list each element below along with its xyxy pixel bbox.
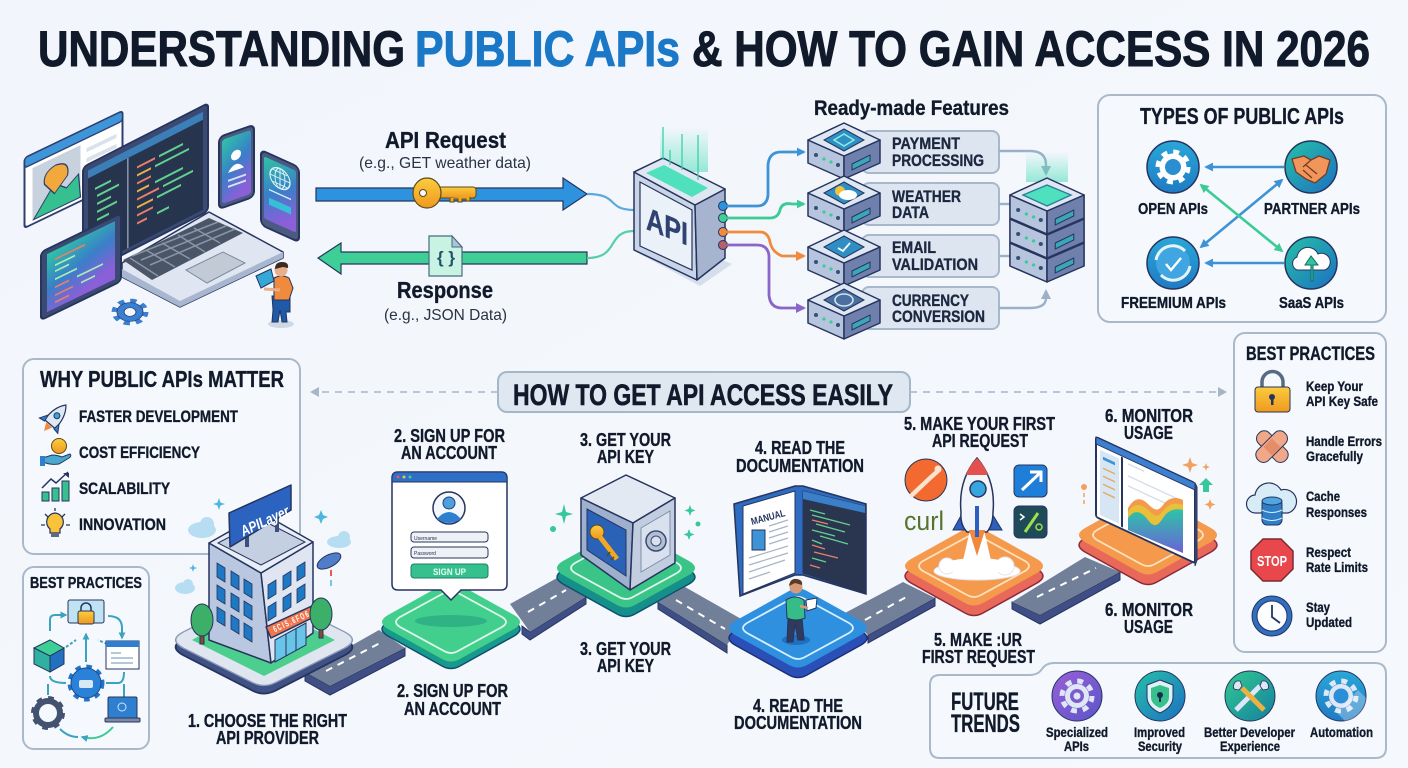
step 3: get API key <box>550 430 700 676</box>
text: response label <box>384 277 507 324</box>
panel: types of public APIs <box>1098 95 1386 322</box>
icon: gear <box>115 301 145 323</box>
heading: ready-made features: Ready-made Features <box>814 97 1009 120</box>
safe with key <box>581 475 675 590</box>
labels: 6. MONITOR <box>1105 406 1193 426</box>
step 1 label: API PROVIDER <box>216 728 319 748</box>
heading: WHY PUBLIC APIs MATTER <box>40 366 284 392</box>
labels: USAGE <box>1124 423 1173 443</box>
platform <box>905 526 1043 616</box>
illustration: client devices <box>24 103 299 328</box>
icon: central gear <box>70 667 102 699</box>
icon: k6 terminal <box>1014 506 1047 538</box>
step 2: sign up <box>382 426 520 719</box>
step 6: monitor usage <box>1079 406 1217 637</box>
trees <box>191 598 332 644</box>
panel: weather data: DATA <box>892 203 929 222</box>
connector arrows <box>48 615 124 738</box>
trend: automation <box>1310 671 1373 740</box>
icon: phone with profile <box>219 125 254 209</box>
item: keep API key safe: Keep Your <box>1306 378 1363 394</box>
item: stay updated: Updated <box>1306 614 1352 630</box>
heading: how to get API access <box>498 372 910 412</box>
shop awning: 6 C I S . 6 F O 6 <box>272 609 310 634</box>
labels: 3. GET YOUR <box>580 430 671 450</box>
arrow: API request <box>316 178 587 210</box>
icon: JSON document <box>429 236 462 276</box>
heading: BEST PRACTICES <box>1246 344 1375 365</box>
building platform <box>176 595 352 694</box>
labels: 4. READ THE <box>753 696 843 716</box>
connector wires to API box <box>587 194 634 258</box>
labels: API KEY <box>597 447 654 467</box>
text: response label: Response <box>397 277 493 303</box>
panel: why public APIs matter: INNOVATION <box>79 515 166 534</box>
item: stay updated <box>1252 596 1352 636</box>
step 1 label <box>188 711 347 748</box>
panel: weather data: WEATHER <box>892 187 961 206</box>
panel: weather data <box>808 176 999 232</box>
labels: DOCUMENTATION <box>736 456 864 476</box>
monitor side edge <box>1195 483 1197 566</box>
arrows between API types <box>1201 167 1284 263</box>
text: curl logo: curl <box>904 506 944 536</box>
icon: grey gear <box>34 699 62 727</box>
panel: email validation: VALIDATION <box>892 255 978 274</box>
item: cache responses: Responses <box>1306 504 1367 520</box>
panel: why public APIs matter: COST EFFICIENCY <box>79 443 201 462</box>
panel: best practices diagram <box>23 567 149 749</box>
trend: specialized APIs: APIs <box>1064 739 1089 754</box>
trend: specialized APIs <box>1046 671 1108 754</box>
API ports <box>718 202 728 250</box>
item: handle errors: Gracefully <box>1306 448 1363 464</box>
panel: future trends <box>930 663 1386 758</box>
icon: key <box>413 178 476 208</box>
labels: AN ACCOUNT <box>401 443 497 463</box>
sign-up form card: Username <box>414 536 437 542</box>
text: API request label: API Request <box>385 127 506 153</box>
text: API request label: (e.g., GET weather data) <box>359 155 531 172</box>
item: stay updated: Stay <box>1306 599 1330 615</box>
road segments <box>305 557 1120 695</box>
launch plume and cloud <box>934 506 1020 580</box>
labels <box>1105 406 1193 637</box>
step 4: read the documentation <box>729 438 867 733</box>
icon: laptop base <box>122 212 283 307</box>
labels: 5. MAKE YOUR FIRST <box>904 414 1055 434</box>
icon: Postman <box>905 459 947 501</box>
heading: TYPES OF PUBLIC APIs <box>1140 103 1344 129</box>
heading: FUTURE <box>951 688 1019 716</box>
heading <box>951 688 1020 738</box>
trend: automation: Automation <box>1310 725 1373 740</box>
labels <box>734 438 864 733</box>
labels: 4. READ THE <box>755 438 845 458</box>
icon: rocket <box>953 458 1002 532</box>
labels: 2. SIGN UP FOR <box>394 426 505 446</box>
rooftop sign APILayer: APILayer <box>237 503 293 541</box>
trend: improved security: Improved <box>1134 725 1185 740</box>
platform <box>382 582 520 668</box>
icon: cost hand coin <box>40 438 71 466</box>
labels <box>580 430 671 676</box>
platform <box>729 588 867 678</box>
labels: 2. SIGN UP FOR <box>397 681 508 701</box>
platform <box>557 528 695 616</box>
icon: laptop screen with code <box>83 103 208 275</box>
sign-up form card <box>392 472 507 600</box>
panel: currency conversion: CURRENCY <box>892 291 970 310</box>
trend: improved security <box>1134 671 1185 754</box>
panel: payment processing: PROCESSING <box>892 151 984 170</box>
icon: cube <box>34 640 64 672</box>
icon: phone with globe <box>261 150 299 242</box>
labels: 5. MAKE :UR <box>934 630 1022 650</box>
trend: better developer experience: Experience <box>1220 739 1280 754</box>
heading: TRENDS <box>951 710 1020 738</box>
labels: 6. MONITOR <box>1105 600 1193 620</box>
icon: open APIs gear <box>1147 141 1199 193</box>
panel: why public APIs matter: FASTER DEVELOPMENT <box>79 407 238 426</box>
icon: scalability chart <box>42 472 69 501</box>
rooftop sign APILayer <box>229 485 293 547</box>
panel: currency conversion: CONVERSION <box>892 307 985 326</box>
illustration: server stack <box>1010 152 1084 282</box>
icon: JSON document: { } <box>437 248 455 267</box>
step 1 label: 1. CHOOSE THE RIGHT <box>188 711 347 731</box>
item: cache responses <box>1247 483 1367 525</box>
item: handle errors: Handle Errors <box>1306 433 1382 449</box>
connector lines to features <box>727 152 804 308</box>
panel: email validation: EMAIL <box>892 238 936 257</box>
API type labels: FREEMIUM APIs <box>1121 295 1226 312</box>
item: respect rate limits: Respect <box>1306 544 1351 560</box>
item: cache responses: Cache <box>1306 488 1340 504</box>
open manual book: MANUAL <box>750 508 787 528</box>
icon: innovation light bulb <box>41 508 70 537</box>
icon: freemium cycle check <box>1147 237 1199 289</box>
labels: DOCUMENTATION <box>734 713 862 733</box>
sparkles <box>1081 457 1216 510</box>
arrows: features to server stack <box>999 151 1046 308</box>
building tower <box>209 513 313 663</box>
title: UNDERSTANDING <box>38 21 405 77</box>
labels: AN ACCOUNT <box>404 699 501 719</box>
labels <box>904 414 1055 667</box>
arrow: response <box>318 236 587 276</box>
panel: payment processing: PAYMENT <box>892 134 961 153</box>
icon: person with laptop <box>256 262 294 328</box>
clouds and sparkles <box>175 498 351 594</box>
platform <box>1079 496 1217 584</box>
heading: BEST PRACTICES <box>30 575 142 592</box>
icon: HTTP client arrow <box>1014 465 1047 497</box>
icon: tablet with code <box>41 213 121 320</box>
item: respect rate limits <box>1251 539 1368 581</box>
item: respect rate limits: STOP <box>1257 553 1287 570</box>
illustration: API box <box>634 127 732 286</box>
trend: better developer experience: Better Developer <box>1204 725 1296 740</box>
panel: email validation <box>808 230 999 286</box>
item: keep API key safe: API Key Safe <box>1306 393 1378 409</box>
labels: 3. GET YOUR <box>580 639 671 659</box>
heading: how to get API access: HOW TO GET API ACCESS EASILY <box>513 379 893 412</box>
API type labels: OPEN APIs <box>1138 201 1208 218</box>
panel: best practices list <box>1234 333 1386 652</box>
text: response label: (e.g., JSON Data) <box>384 307 507 324</box>
API type labels <box>1121 201 1360 312</box>
step 5: make first API request <box>904 414 1055 667</box>
panel: currency conversion <box>808 283 999 339</box>
trend: improved security: Security <box>1138 739 1182 754</box>
API box label: API <box>646 201 688 253</box>
labels: FIRST REQUEST <box>922 647 1035 667</box>
trend: better developer experience <box>1204 671 1296 754</box>
open manual book <box>734 486 866 596</box>
item: keep API key safe <box>1255 372 1378 412</box>
icon: rocket <box>35 397 75 439</box>
title <box>38 21 1370 77</box>
text: API request label <box>359 127 531 172</box>
title: PUBLIC APIs <box>415 21 680 77</box>
panel: why public APIs matter <box>23 359 300 554</box>
icon: partner handshake <box>1285 141 1337 193</box>
API type labels: PARTNER APIs <box>1264 201 1360 218</box>
sign-up form card: SIGN UP <box>433 567 467 578</box>
sparkles <box>550 504 700 540</box>
labels <box>394 426 508 719</box>
sign-up form card: Password <box>414 551 436 557</box>
labels: API KEY <box>597 656 654 676</box>
reader figure <box>782 579 817 645</box>
step 1: API provider building <box>175 485 352 694</box>
shop awning <box>266 605 314 638</box>
icon: browser window <box>24 111 122 228</box>
item: respect rate limits: Rate Limits <box>1306 559 1368 575</box>
dashed arrows <box>310 387 1227 397</box>
item: handle errors <box>1253 428 1382 465</box>
labels: API REQUEST <box>932 431 1028 451</box>
API type labels: SaaS APIs <box>1279 295 1344 312</box>
trend: specialized APIs: Specialized <box>1046 725 1108 740</box>
panel: payment processing <box>808 123 999 179</box>
labels: USAGE <box>1124 617 1173 637</box>
icon: card with lock <box>68 600 104 624</box>
icon: laptop <box>105 697 140 722</box>
panel: why public APIs matter: SCALABILITY <box>79 479 171 498</box>
icon: SaaS cloud upload <box>1285 237 1337 289</box>
icon: window <box>106 641 139 669</box>
monitor dashboard <box>1096 437 1197 566</box>
